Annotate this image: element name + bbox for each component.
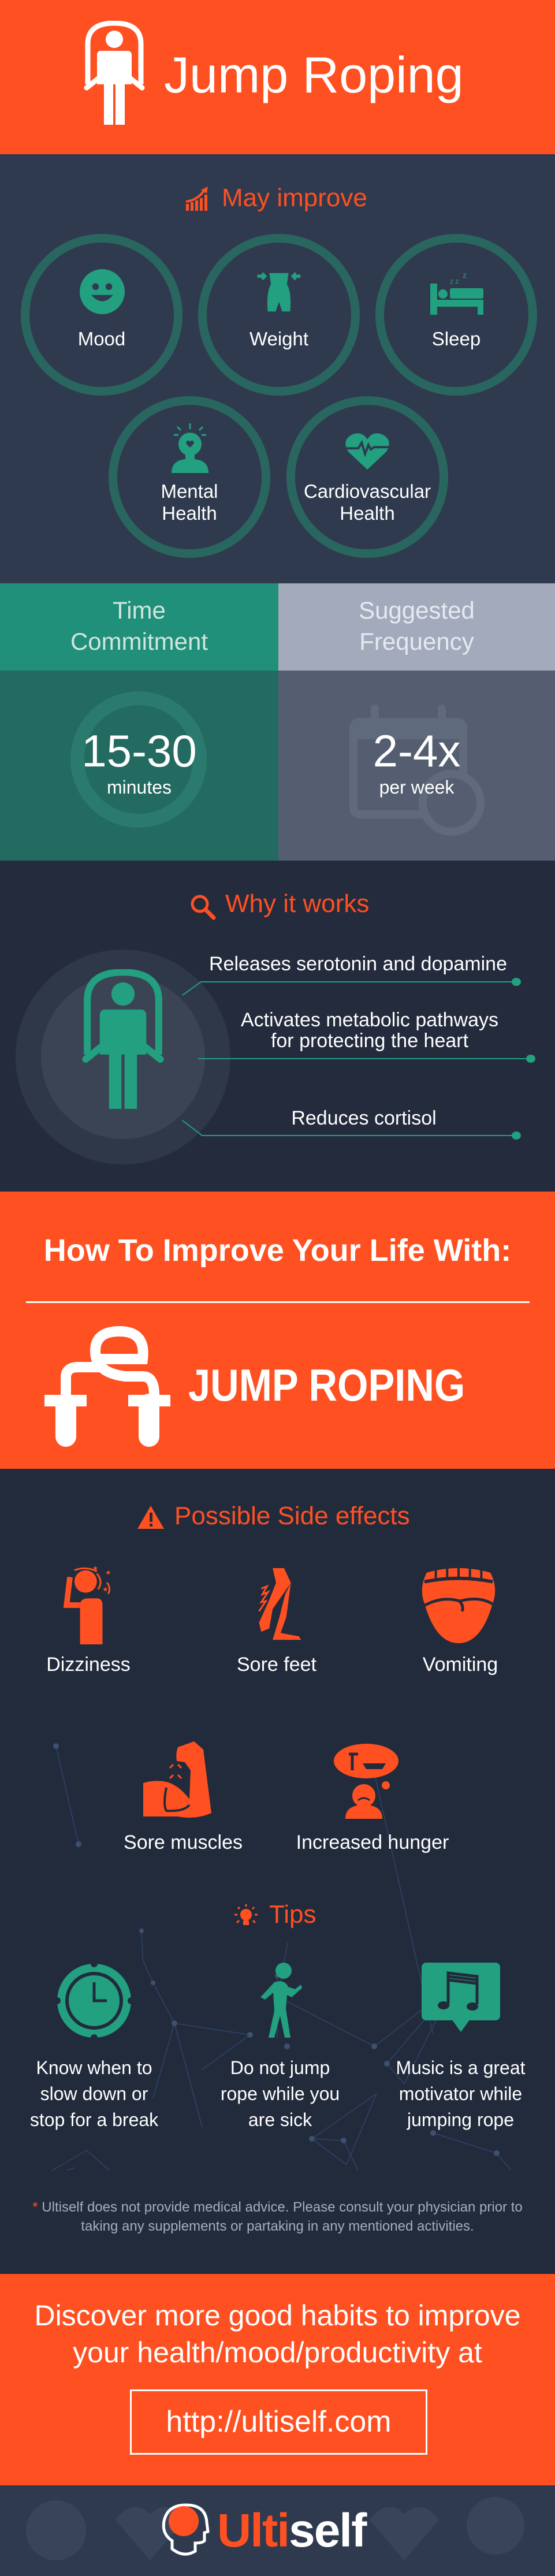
tip: music motivator: Music is a great [396,2057,526,2078]
circle: weight [198,234,360,396]
icon: sore muscles [143,1741,211,1818]
tip: music motivator: motivator while [399,2083,522,2104]
label: vomiting: Vomiting [423,1654,498,1676]
icon: clock [57,1964,131,2038]
circle: mental health: Health [162,502,217,524]
text: releases serotonin: Releases serotonin and dopamine [209,953,507,975]
heading: tips: Tips [269,1900,316,1929]
footer [0,2485,555,2576]
heading: time commitment: Commitment [70,628,208,655]
heading: suggested frequency: Suggested [359,597,475,624]
circle: sleep: Sleep [432,328,480,349]
icon: dizziness: ★ [102,1586,109,1594]
circle: weight: Weight [249,328,308,349]
value: 2-4x per week: 2-4x [373,725,460,776]
heading: time commitment [0,583,278,671]
text: activates metabolic pathways [241,1009,498,1052]
tip: do not jump while sick: Do not jump [230,2057,330,2078]
logo: ultiself: Ultiself [217,2504,366,2557]
tip: music motivator: jumping rope [407,2109,514,2130]
circle: cardiovascular health: Cardiovascular [304,481,431,502]
icon: jump rope [44,1326,170,1447]
icon: dizziness [64,1566,111,1644]
text: discover [34,2299,521,2369]
circle: mood [21,234,182,396]
heading: suggested frequency: Frequency [359,628,474,655]
tip: know when to slow down: slow down or [40,2083,148,2104]
value: 15-30 minutes: 15-30 [81,725,197,776]
disclaimer: * Ultiself does not provide medical advice. Please consult your physician prior to taking any supplements or partaking in any mentioned activities. [32,2199,523,2234]
label: dizziness: Dizziness [46,1654,131,1676]
label: sore feet: Sore feet [237,1654,316,1676]
icon: music speech bubble [422,1963,500,2032]
connector lines [182,978,535,1140]
text: activates metabolic pathways: Activates metabolic pathways [241,1009,498,1031]
title: Jump Roping [164,46,464,103]
banner: how to improve [0,1192,555,1469]
value: 15-30 minutes: minutes [107,777,172,798]
heading: may improve: May improve [222,184,367,212]
panel: side effects and tips [0,1469,555,2274]
panel: suggested frequency [278,583,555,861]
tip: know when to slow down: Know when to [36,2057,152,2078]
tip: do not jump while sick: rope while you [221,2083,340,2104]
url button [130,2389,427,2455]
network background [52,1743,512,2171]
heading: tips [234,1900,316,1929]
figure with circles [16,950,230,1164]
panel: discover cta [0,2274,555,2485]
icon: sick person [260,1963,302,2038]
heading: suggested frequency [278,583,555,671]
heading: how to improve: How To Improve Your Life With: [44,1233,511,1268]
icon: sore feet [258,1568,301,1640]
circle: cardiovascular health: Health [340,502,395,524]
circle: sleep: z z [450,277,459,285]
heading: jump roping: JUMP ROPING [188,1360,465,1410]
circle: mental health: Mental [161,481,218,502]
label: sore muscles: Sore muscles [124,1832,243,1853]
faded background icons [26,2497,524,2560]
panel: may improve [0,154,555,583]
icon: brain head [162,2503,210,2556]
header band [0,0,555,154]
tip: do not jump while sick: are sick [248,2109,312,2130]
heading: time commitment: Time [113,597,166,624]
panel: why it works [0,861,555,1192]
circle: mental health [109,396,270,558]
text: discover: your health/mood/productivity at [73,2336,482,2369]
circle: cardiovascular health [286,396,448,558]
icon: faded calendar [349,705,485,836]
tip: do not jump while sick [221,1963,340,2130]
icon: increased hunger [334,1744,398,1819]
heading: why it works: Why it works [225,889,369,918]
label: increased hunger: Increased hunger [296,1832,449,1853]
tip: know when to slow down: stop for a break [30,2109,158,2130]
panel: time commitment [0,583,278,861]
icon: vomiting [422,1568,496,1643]
tip: know when to slow down [30,1964,158,2130]
icon: person jumping rope [84,21,144,125]
icon: person jumping rope (teal) [82,969,164,1109]
text: activates metabolic pathways: for protecting the heart [271,1030,468,1052]
heading: possible side effects: Possible Side effects [174,1502,410,1530]
circle: sleep: z [463,270,467,280]
text: discover: Discover more good habits to improve [34,2299,521,2332]
circle: mood: Mood [78,328,125,349]
tip: music motivator [396,1963,526,2130]
value: 2-4x per week: per week [379,777,454,798]
url button: http://ultiself.com [166,2405,392,2439]
icon: dizziness: ★ [105,1569,111,1577]
text: reduces cortisol: Reduces cortisol [291,1107,437,1129]
icon: faded clock [70,691,207,828]
circle: sleep [375,234,537,396]
